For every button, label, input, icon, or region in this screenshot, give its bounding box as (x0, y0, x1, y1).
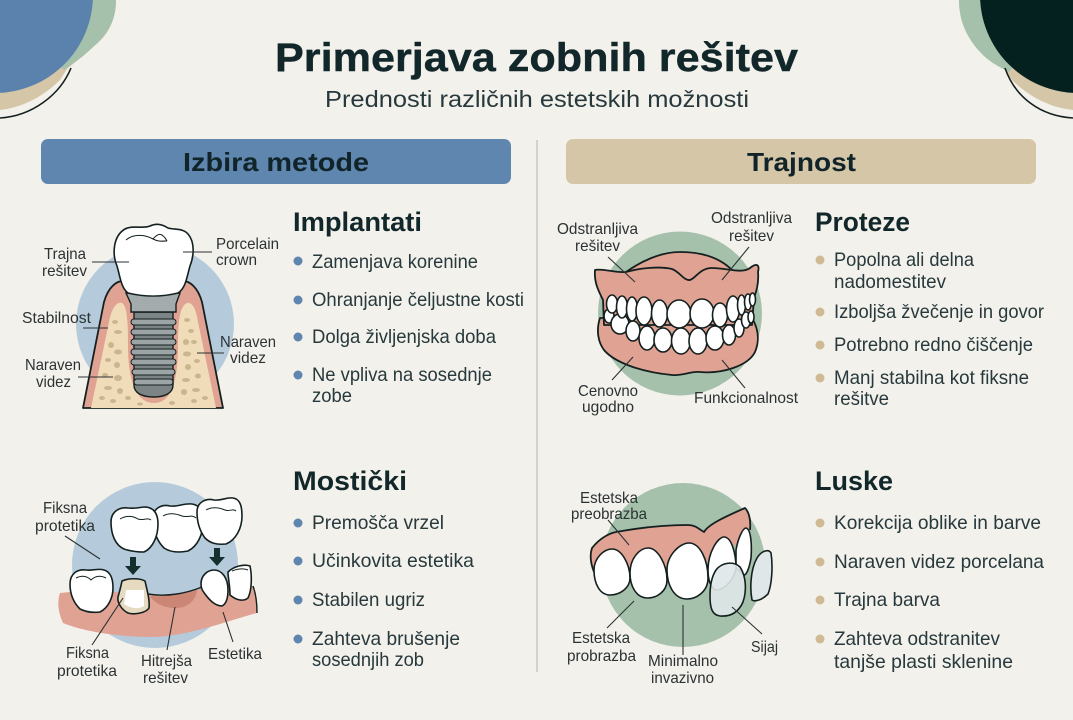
panel: Proteze: Izboljša žvečenje in govor (834, 301, 1044, 323)
panel: Proteze: Proteze (815, 207, 910, 237)
callouts (608, 520, 629, 545)
illustration: dental bridge: Estetika (208, 646, 262, 663)
panel: Implantati: Ohranjanje čeljustne kosti (312, 289, 524, 311)
illustration: dental bridge: Fiksna (43, 500, 87, 517)
implant screw (134, 312, 173, 397)
panel: Mostički: Mostički (293, 466, 407, 496)
illustration: veneers: probrazba (567, 648, 636, 665)
illustration: dental bridge: rešitev (143, 670, 188, 687)
callouts (608, 257, 635, 282)
illustration: dentures: Cenovno (578, 383, 638, 400)
illustration: dental bridge: protetika (57, 663, 117, 680)
illustration: dental bridge (35, 482, 262, 687)
panel: Luske (815, 466, 1044, 673)
banner: Trajnost (566, 139, 1036, 184)
illustration: dentures: ugodno (582, 399, 634, 416)
bone (91, 303, 216, 408)
illustration: veneers (567, 483, 778, 687)
illustration: dental implant: rešitev (42, 263, 87, 280)
title: Primerjava zobnih rešitev (275, 36, 799, 80)
illustration: dental implant: Stabilnost (22, 310, 92, 327)
panel: Proteze (815, 207, 1044, 410)
illustration: dental implant (22, 224, 279, 408)
panel: Mostički: sosednjih zob (312, 649, 424, 671)
banner: Trajnost: Trajnost (747, 147, 856, 177)
panel: Implantati: Implantati (293, 207, 422, 237)
callouts (92, 261, 129, 263)
lower gum (598, 318, 758, 375)
arrows (125, 557, 141, 575)
illustration: dentures: rešitev (575, 238, 620, 255)
illustration: veneers: Minimalno (648, 653, 718, 670)
gum (591, 508, 750, 572)
illustration: dentures: Odstranljiva (557, 221, 638, 238)
banner: Izbira metode (41, 139, 511, 184)
illustration: dental implant: crown (216, 252, 257, 269)
panel: Mostički: Premošča vrzel (312, 512, 444, 534)
gum (58, 584, 257, 637)
illustration: dental bridge: Hitrejša (141, 653, 192, 670)
panel: Luske: Korekcija oblike in barve (834, 512, 1041, 534)
illustration: dental implant: Porcelain (216, 236, 279, 253)
illustration: dental implant: videz (36, 374, 71, 391)
illustration: dentures: Odstranljiva (711, 210, 792, 227)
center divider (536, 140, 538, 672)
upper gum (626, 252, 732, 285)
callouts (65, 536, 100, 559)
natural teeth (736, 528, 751, 575)
illustration: veneers: preobrazba (571, 506, 647, 523)
illustration: dental implant: videz (230, 350, 266, 367)
panel: Implantati: Ne vpliva na sosednje (312, 364, 492, 386)
prepared tooth (118, 579, 149, 614)
corner decoration: top left (0, 0, 116, 118)
panel: Proteze: nadomestitev (834, 271, 946, 293)
illustration: dentures: Funkcionalnost (694, 390, 799, 407)
panel: Mostički: Stabilen ugriz (312, 589, 425, 611)
panel: Mostički: Učinkovita estetika (312, 550, 474, 572)
panel: Mostički: Zahteva brušenje (312, 628, 460, 650)
illustration: veneers: Sijaj (751, 639, 778, 656)
panel: Proteze: Popolna ali delna (834, 249, 974, 271)
illustration: dental bridge: protetika (35, 518, 95, 535)
banner: Izbira metode: Izbira metode (183, 147, 369, 177)
panel: Proteze: rešitve (834, 388, 889, 410)
panel: Luske: Zahteva odstranitev (834, 628, 1000, 650)
panel: Luske: Trajna barva (834, 589, 940, 611)
left tooth (70, 569, 113, 612)
illustration: dental implant: Naraven (220, 334, 276, 351)
right teeth (228, 565, 251, 600)
panel: Mostički (293, 466, 474, 671)
panel: Implantati: zobe (312, 385, 352, 407)
panel: Proteze: Manj stabilna kot fiksne (834, 367, 1029, 389)
panel: Implantati: Dolga življenjska doba (312, 326, 496, 348)
illustration: veneers: Estetska (572, 630, 630, 647)
crown (114, 224, 193, 296)
gum (83, 281, 223, 408)
upper teeth (606, 293, 756, 328)
illustration: veneers: Estetska (580, 490, 638, 507)
panel: Luske: Luske (815, 466, 893, 496)
panel: Luske: tanjše plasti sklenine (834, 651, 1013, 673)
illustration: dental bridge: Fiksna (66, 645, 109, 662)
lower teeth (604, 309, 754, 354)
illustration: dental implant: Trajna (44, 246, 86, 263)
panel: Proteze: Potrebno redno čiščenje (834, 334, 1033, 356)
illustration: veneers: invazivno (651, 670, 714, 687)
panel: Implantati (293, 207, 524, 407)
panel: Implantati: Zamenjava korenine (312, 251, 478, 273)
illustration: dental implant: Naraven (25, 357, 81, 374)
subtitle: Prednosti različnih estetskih možnosti (325, 86, 749, 112)
illustration: dentures (557, 210, 799, 416)
bridge crowns (153, 504, 203, 552)
illustration: dentures: rešitev (729, 228, 774, 245)
veneer shells (710, 563, 745, 616)
corner decoration: top right (959, 0, 1073, 118)
abutment (126, 293, 180, 312)
panel: Luske: Naraven videz porcelana (834, 551, 1044, 573)
